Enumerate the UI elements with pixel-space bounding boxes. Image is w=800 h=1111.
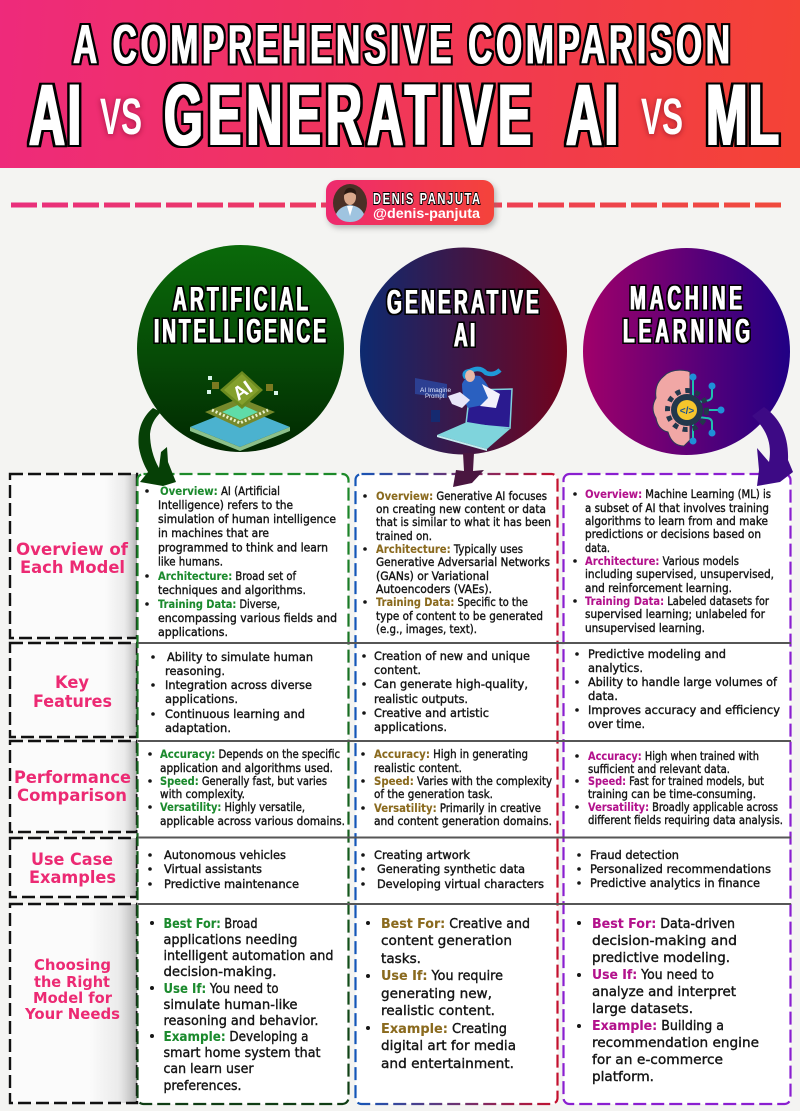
circle: artificial intelligence: ARTIFICIAL <box>173 280 308 318</box>
text: AI choosing guidance: simulate human-like <box>164 998 298 1013</box>
author badge: DENIS PANJUTA <box>373 189 480 207</box>
text: machine learning choosing guidance: predictive modeling. <box>592 951 730 966</box>
text: machine learning key features: Improves accuracy and efficiency <box>588 703 780 717</box>
text: AI overview: programmed to think and learn <box>158 540 328 554</box>
text: machine learning performance: Speed: Fast for trained models, but <box>588 775 764 788</box>
text: AI overview: in machines that are <box>158 526 269 540</box>
text: AI use cases <box>148 849 299 891</box>
text: generative AI choosing guidance: tasks. <box>381 952 421 967</box>
text: AI key features <box>151 650 313 735</box>
text: machine learning performance: sufficient and relevant data. <box>588 763 730 776</box>
text: machine learning choosing guidance: Example: Building a <box>592 1019 724 1034</box>
text: machine learning choosing guidance <box>577 917 759 1085</box>
text: generative AI choosing guidance <box>366 917 530 1072</box>
title line two: AI <box>29 66 81 163</box>
text: AI performance: Accuracy: Depends on the specific <box>160 748 340 761</box>
text: AI choosing guidance: Use If: You need to <box>164 982 278 997</box>
icon: brain with gear <box>653 370 724 446</box>
text: generative AI overview: on creating new content or data <box>376 502 546 516</box>
row label: choosing the right model <box>24 956 120 1023</box>
row label cells <box>10 474 137 1103</box>
text: generative AI choosing guidance: and entertainment. <box>381 1057 514 1072</box>
text: machine learning use cases: Fraud detection <box>590 849 679 862</box>
text: generative AI choosing guidance: content generation <box>381 934 512 949</box>
text: generative AI overview: type of content to be generated <box>376 609 543 623</box>
text: AI choosing guidance: reasoning and behavior. <box>164 1014 318 1029</box>
title line one: A COMPREHENSIVE COMPARISON <box>73 13 730 76</box>
text: generative AI use cases <box>361 849 544 891</box>
text: machine learning overview: Training Data: Labeled datasets for <box>585 594 769 608</box>
text: machine learning performance: training can be time-consuming. <box>588 788 756 801</box>
icon: person at laptop: Prompt <box>425 394 445 400</box>
text: AI use cases: Predictive maintenance <box>164 878 299 891</box>
text: generative AI performance: and content generation domains. <box>374 815 552 828</box>
text: generative AI choosing guidance: Example: Creating <box>381 1022 507 1037</box>
row label: overview of each model <box>16 540 129 577</box>
text: AI performance: applicable across various domains. <box>160 815 345 828</box>
text: AI use cases: Autonomous vehicles <box>164 849 286 862</box>
text: generative AI performance: of the generation task. <box>374 788 493 801</box>
arrow: AI circle to column <box>139 408 176 486</box>
icon: person at laptop <box>415 369 512 451</box>
author badge: @denis-panjuta <box>373 205 480 221</box>
text: machine learning performance <box>575 750 783 827</box>
text: machine learning key features: over time. <box>588 717 645 731</box>
text: AI performance: Versatility: Highly versatile, <box>160 801 305 814</box>
author badge <box>326 180 496 228</box>
text: generative AI performance <box>361 748 552 828</box>
text: machine learning choosing guidance: recommendation engine <box>592 1036 759 1051</box>
text: generative AI overview: Architecture: Typically uses <box>376 542 523 556</box>
text: machine learning overview: unsupervised learning. <box>585 621 705 635</box>
text: AI choosing guidance <box>150 917 334 1094</box>
text: machine learning overview: algorithms to learn from and make <box>585 514 768 528</box>
text: AI choosing guidance: applications needing <box>164 933 298 948</box>
text: machine learning key features: Ability to handle large volumes of <box>588 675 778 689</box>
title line two: VS <box>100 89 142 146</box>
text: machine learning overview: data. <box>585 541 610 555</box>
text: AI overview <box>145 484 337 639</box>
text: machine learning choosing guidance: decision-making and <box>592 934 737 949</box>
arrow: generative AI circle to column <box>453 453 484 487</box>
text: machine learning choosing guidance: analyze and interpret <box>592 985 736 1000</box>
circle: generative AI: GENERATIVE <box>387 283 539 321</box>
title line two: ML <box>706 66 779 163</box>
panel: machine learning column <box>564 474 790 1104</box>
text: AI choosing guidance: Best For: Broad <box>164 917 258 932</box>
text: AI choosing guidance: intelligent automation and <box>164 949 334 964</box>
text: generative AI choosing guidance: Best For: Creative and <box>381 917 530 932</box>
text: AI key features: adaptation. <box>165 721 231 735</box>
title line two <box>29 66 779 163</box>
text: AI performance: application and algorithms used. <box>160 762 333 775</box>
text: machine learning choosing guidance: large datasets. <box>592 1002 693 1017</box>
text: AI choosing guidance: Example: Developing a <box>164 1030 308 1045</box>
text: generative AI overview: Autoencoders (VAEs). <box>376 582 492 596</box>
text: generative AI use cases: Developing virtual characters <box>377 878 544 891</box>
text: AI performance <box>148 748 345 828</box>
text: AI key features: applications. <box>165 692 238 706</box>
text: AI choosing guidance: preferences. <box>164 1079 242 1094</box>
title line two: AI <box>566 66 618 163</box>
text: machine learning performance: Versatility: Broadly applicable across <box>588 801 778 814</box>
row label: use case examples: Use Case <box>31 850 113 869</box>
text: machine learning overview: and reinforcement learning. <box>585 581 732 595</box>
text: AI key features: reasoning. <box>165 664 225 678</box>
row label: use case examples <box>29 850 116 887</box>
text: generative AI overview <box>363 489 551 636</box>
row label: use case examples: Examples <box>29 868 116 887</box>
dashed divider <box>11 202 786 208</box>
text: AI key features: Integration across diverse <box>165 678 312 692</box>
text: generative AI overview: (e.g., images, text). <box>376 622 477 636</box>
text: AI use cases: Virtual assistants <box>164 863 262 876</box>
icon: AI chip: AI <box>229 377 257 405</box>
text: AI overview: Intelligence) refers to the <box>158 498 293 512</box>
text: machine learning choosing guidance: platform. <box>592 1070 654 1085</box>
text: generative AI overview: Generative Adversarial Networks <box>376 555 550 569</box>
row label: performance comparison: Performance <box>14 768 131 787</box>
text: machine learning key features <box>575 647 780 731</box>
text: AI overview: applications. <box>158 625 228 639</box>
circle: machine learning: MACHINE <box>630 279 742 317</box>
icon: person at laptop: AI Imagine <box>420 387 451 394</box>
title line two: GENERATIVE <box>164 66 531 163</box>
circle: machine learning <box>583 248 790 455</box>
icon: AI chip <box>190 371 290 451</box>
text: generative AI choosing guidance: realistic content. <box>381 1004 495 1019</box>
text: machine learning overview: Architecture: Various models <box>585 554 739 568</box>
arrow: machine learning circle to column <box>752 407 793 486</box>
row label: performance comparison <box>14 768 131 805</box>
text: machine learning choosing guidance: for an e-commerce <box>592 1053 723 1068</box>
avatar <box>333 184 367 222</box>
row label: choosing the right model: Choosing <box>34 956 111 974</box>
text: generative AI key features: Can generate high-quality, <box>374 677 528 691</box>
panel: artificial intelligence column <box>138 474 348 1104</box>
text: machine learning key features: data. <box>588 689 618 703</box>
text: AI key features: Continuous learning and <box>165 707 305 721</box>
row label: key features <box>33 673 112 711</box>
text: machine learning performance: different fields requiring data analysis. <box>588 814 783 827</box>
circle: generative AI: AI <box>454 316 475 354</box>
text: AI choosing guidance: can learn user <box>164 1062 254 1077</box>
text: AI performance: Speed: Generally fast, but varies <box>160 775 327 788</box>
text: AI choosing guidance: smart home system that <box>164 1046 320 1061</box>
row label: performance comparison: Comparison <box>17 786 127 805</box>
row label: choosing the right model: the Right <box>34 973 110 991</box>
text: machine learning key features: Predictive modeling and <box>588 647 726 661</box>
text: AI overview: techniques and algorithms. <box>158 583 306 597</box>
text: generative AI key features <box>362 649 530 734</box>
text: generative AI performance: Accuracy: High in generating <box>374 748 528 761</box>
text: generative AI overview: Overview: Generative AI focuses <box>376 489 547 503</box>
text: AI overview: Overview: AI (Artificial <box>160 484 280 498</box>
text: machine learning overview: a subset of AI that involves training <box>585 501 769 515</box>
text: generative AI overview: that is similar to what it has been <box>376 515 551 529</box>
text: machine learning overview: supervised learning; unlabeled for <box>585 607 765 621</box>
panel: generative AI column <box>356 474 558 1104</box>
text: AI performance: with complexity. <box>160 788 245 801</box>
text: generative AI choosing guidance: generating new, <box>381 987 492 1002</box>
text: generative AI key features: content. <box>374 663 421 677</box>
text: generative AI performance: Versatility: Primarily in creative <box>374 802 541 815</box>
text: generative AI key features: Creative and artistic <box>374 706 489 720</box>
row label: key features: Key <box>55 673 89 692</box>
text: machine learning overview: predictions or decisions based on <box>585 527 761 541</box>
row label: key features: Features <box>33 692 112 711</box>
text: generative AI choosing guidance: Use If: You require <box>381 969 503 984</box>
text: machine learning choosing guidance: Best For: Data-driven <box>592 917 735 932</box>
text: machine learning key features: analytics. <box>588 661 643 675</box>
circle: artificial intelligence: INTELLIGENCE <box>154 312 326 350</box>
text: generative AI key features: Creation of new and unique <box>374 649 530 663</box>
header banner <box>0 0 800 168</box>
row label: choosing the right model: Model for <box>33 989 113 1007</box>
text: AI overview: like humans. <box>158 554 223 568</box>
circle: artificial intelligence <box>137 245 344 452</box>
circle: machine learning: LEARNING <box>623 312 750 350</box>
title line two: VS <box>100 88 142 145</box>
text: AI overview: simulation of human intelligence <box>158 512 336 526</box>
row label: overview of each model: Overview of <box>16 540 129 559</box>
text: machine learning use cases <box>577 849 771 890</box>
text: generative AI key features: realistic outputs. <box>374 692 468 706</box>
text: generative AI performance: Speed: Varies with the complexity <box>374 775 552 788</box>
text: AI overview: encompassing various fields and <box>158 611 337 625</box>
text: generative AI overview: (GANs) or Variational <box>376 569 489 583</box>
icon: brain with gear: </> <box>680 406 694 417</box>
text: AI choosing guidance: decision-making. <box>164 965 276 980</box>
text: machine learning choosing guidance: Use If: You need to <box>592 968 714 983</box>
text: machine learning use cases: Personalized recommendations <box>590 863 771 876</box>
text: generative AI use cases: Generating synthetic data <box>377 863 525 876</box>
text: generative AI performance: realistic content. <box>374 762 462 775</box>
text: generative AI overview: trained on. <box>376 529 432 543</box>
text: generative AI use cases: Creating artwork <box>374 849 470 862</box>
text: AI key features: Ability to simulate human <box>167 650 313 664</box>
text: generative AI choosing guidance: digital art for media <box>381 1039 516 1054</box>
title line two: VS <box>641 89 683 146</box>
text: machine learning overview: including supervised, unsupervised, <box>585 567 774 581</box>
row label: overview of each model: Each Model <box>20 558 125 577</box>
text: machine learning use cases: Predictive analytics in finance <box>590 877 760 890</box>
text: machine learning overview: Overview: Machine Learning (ML) is <box>585 487 771 501</box>
text: machine learning overview <box>573 487 774 635</box>
text: AI overview: Training Data: Diverse, <box>158 597 280 611</box>
text: generative AI overview: Training Data: Specific to the <box>376 595 528 609</box>
text: generative AI key features: applications. <box>374 720 447 734</box>
row label: choosing the right model: Your Needs <box>24 1005 120 1023</box>
text: machine learning performance: Accuracy: High when trained with <box>588 750 759 763</box>
text: AI overview: Architecture: Broad set of <box>158 569 297 583</box>
title line two: VS <box>641 88 683 145</box>
circle: generative AI <box>360 248 567 454</box>
